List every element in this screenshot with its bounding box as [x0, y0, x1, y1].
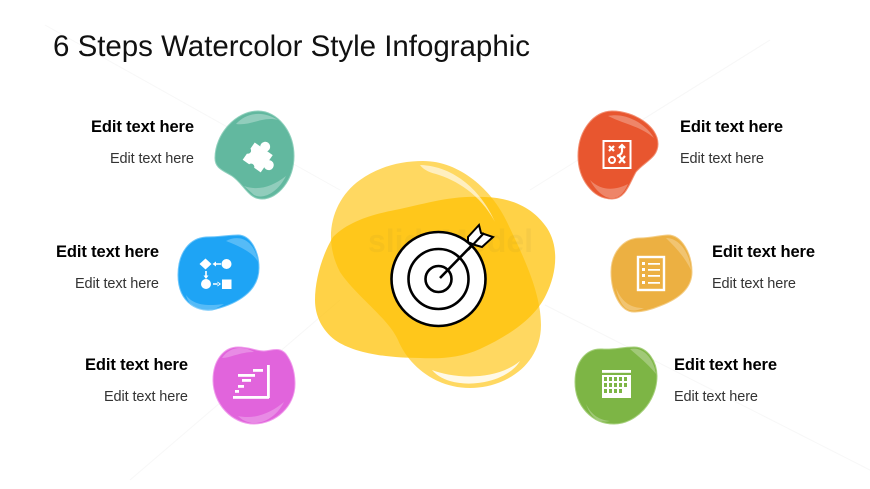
- icon: target with arrow: [392, 225, 493, 326]
- text block: step 2: Edit text here: [56, 243, 159, 261]
- step 6: calendar: [575, 347, 777, 424]
- blob highlights: [420, 165, 520, 384]
- text block: step 5: Edit text here: [712, 276, 796, 292]
- text block: step 4: Edit text here: [680, 151, 764, 167]
- text block: step 4: [680, 118, 783, 167]
- text block: step 1: [91, 118, 194, 167]
- blob: magenta: [213, 347, 295, 424]
- text block: step 3: [85, 356, 188, 405]
- step 2: flowchart: [56, 235, 259, 310]
- step 5: checklist: [611, 235, 815, 312]
- icon: calendar: [602, 370, 631, 398]
- text block: step 6: Edit text here: [674, 356, 777, 374]
- blob: green: [575, 347, 657, 424]
- text block: step 6: Edit text here: [674, 389, 758, 405]
- text block: step 2: [56, 243, 159, 292]
- blob: teal: [215, 111, 294, 199]
- text block: step 3: Edit text here: [85, 356, 188, 374]
- icon: flowchart: [200, 258, 232, 289]
- icon: strategy notebook: [604, 141, 630, 168]
- step 1: puzzle: [91, 111, 294, 199]
- blob: red: [578, 111, 658, 199]
- text block: step 1: Edit text here: [110, 151, 194, 167]
- watermark: slideModel: [368, 223, 533, 259]
- blob: blue: [178, 235, 259, 310]
- icon: gantt steps: [233, 365, 270, 399]
- text block: step 6: [674, 356, 777, 405]
- central target graphic: [315, 161, 555, 388]
- text block: step 5: Edit text here: [712, 243, 815, 261]
- title: 6 Steps Watercolor Style Infographic: [53, 30, 530, 63]
- step 3: gantt chart: [85, 347, 295, 424]
- text block: step 5: [712, 243, 815, 292]
- icon: puzzle piece: [237, 134, 283, 180]
- text block: step 4: Edit text here: [680, 118, 783, 136]
- central watercolor blobs: [315, 161, 555, 388]
- text block: step 3: Edit text here: [104, 389, 188, 405]
- blob: amber: [611, 235, 692, 312]
- icon: checklist: [638, 257, 664, 290]
- text block: step 1: Edit text here: [91, 118, 194, 136]
- text block: step 2: Edit text here: [75, 276, 159, 292]
- step 4: strategy: [578, 111, 783, 199]
